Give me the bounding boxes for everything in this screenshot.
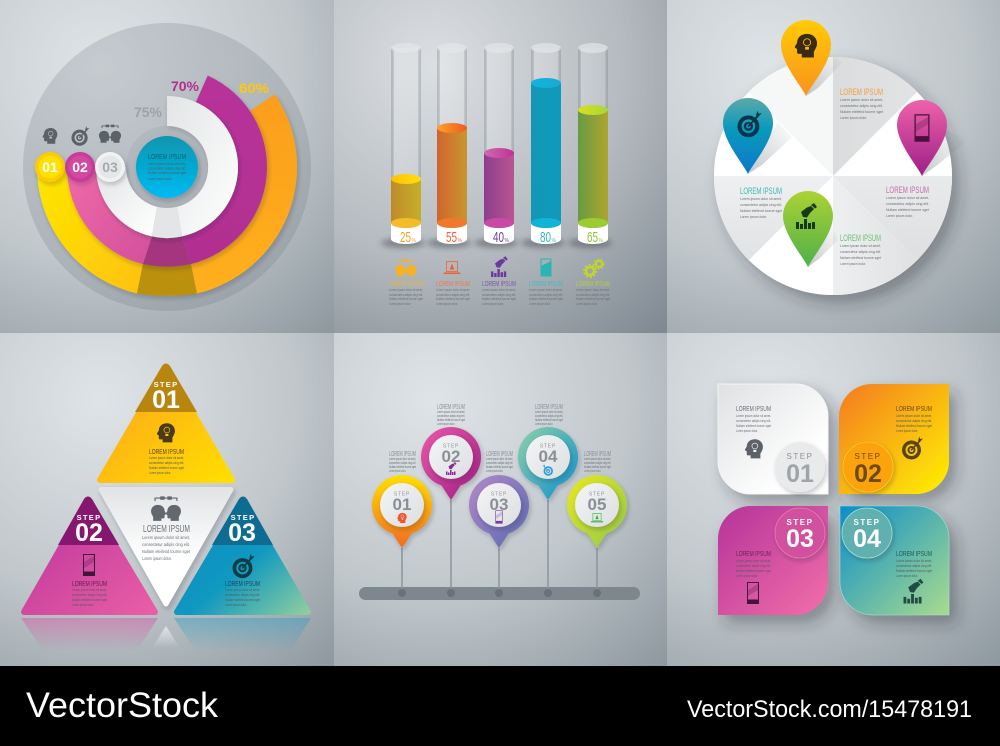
outer ring: 60% yellow orange	[37, 94, 297, 296]
center inverted triangle: Nullam eleifend tourne sget	[142, 549, 191, 554]
pin step 04	[518, 427, 578, 500]
square step 01: consectetur adipis cing elit.	[736, 419, 771, 423]
square step 04: consectetur adipis cing elit.	[896, 564, 932, 568]
triangle step 03: 03	[228, 519, 256, 547]
pin step 01	[372, 475, 432, 548]
square step 02: consectetur adipis cing elit.	[896, 419, 932, 423]
triangle step 01: Lorem ipsum dolor.	[149, 471, 171, 475]
pin step 01: 01	[393, 495, 411, 514]
block text east: Nullam eleifend tourne sget	[886, 208, 929, 212]
tube 65%: 65	[587, 229, 598, 246]
tube 65%	[568, 43, 612, 248]
tube 25%	[381, 43, 425, 248]
text above pin 02: Nullam eleifend tourne sget	[437, 418, 465, 422]
caption 4: LOREM IPSUM	[529, 279, 563, 288]
text above pin 01: Lorem ipsum dolor.	[389, 469, 406, 473]
text above pin 01: LOREM IPSUM	[389, 449, 416, 458]
square step 04: LOREM IPSUM	[896, 549, 932, 558]
square step 03: Lorem ipsum dolor sit amet,	[736, 559, 771, 563]
square step 04: STEP	[854, 518, 880, 527]
text above pin 01: Nullam eleifend tourne sget	[389, 465, 416, 469]
caption 4: Lorem ipsum dolor sit amet,	[529, 288, 563, 292]
tube 55%	[427, 43, 471, 248]
tube 40%: %	[504, 238, 510, 244]
block text south: Nullam eleifend tourne sget	[840, 256, 881, 260]
square step 02: Lorem ipsum dolor sit amet,	[896, 414, 932, 418]
caption 1: Lorem ipsum dolor.	[389, 302, 411, 306]
caption 3: Nullam eleifend tourne sget	[482, 297, 516, 301]
tube 40%	[474, 43, 518, 248]
text above pin 03	[486, 449, 513, 473]
number badge 01	[35, 152, 65, 182]
center inverted triangle	[101, 490, 231, 604]
panel: glass tube bar chart	[334, 0, 667, 333]
text above pin 05: Lorem ipsum dolor sit amet,	[584, 457, 611, 461]
tube 55%: %	[458, 238, 462, 244]
center circle with text	[126, 126, 208, 208]
text above pin 05: consectetur adipis cing elit.	[584, 461, 611, 465]
square step 04: Nullam eleifend tourne sget	[896, 569, 932, 573]
caption 3: Lorem ipsum dolor sit amet,	[482, 288, 516, 292]
block text north east: Lorem ipsum dolor sit amet,	[840, 98, 883, 102]
caption 2: Lorem ipsum dolor sit amet,	[436, 288, 470, 292]
percent labels: 60%	[239, 80, 270, 96]
caption 1: Nullam eleifend tourne sget	[389, 297, 423, 301]
triangle step 02: 02	[75, 519, 103, 547]
triangle step 03: Lorem ipsum dolor.	[225, 603, 247, 607]
caption 3: Lorem ipsum dolor.	[482, 302, 504, 306]
text above pin 04: LOREM IPSUM	[535, 402, 563, 411]
center inverted triangle: consectetur adipis cing elit.	[142, 542, 190, 547]
block text west: consectetur adipis cing elit.	[740, 203, 782, 207]
icon row	[42, 125, 121, 146]
block text east: LOREM IPSUM	[886, 185, 929, 195]
square step 02: LOREM IPSUM	[896, 404, 932, 413]
text above pin 04	[535, 402, 563, 426]
caption 2: LOREM IPSUM	[436, 279, 470, 288]
text above pin 02: Lorem ipsum dolor sit amet,	[437, 410, 465, 414]
square step 04: 04	[853, 525, 881, 553]
triangle step 02: Lorem ipsum dolor sit amet,	[72, 588, 107, 592]
tube 80%: 80	[540, 229, 551, 246]
square step 01: 01	[786, 460, 814, 488]
square step 01	[718, 384, 828, 494]
center inverted triangle: Lorem ipsum dolor sit amet,	[142, 535, 190, 540]
block text north east: Nullam eleifend tourne sget	[840, 110, 883, 114]
square step 03	[718, 506, 828, 615]
pin step 05	[567, 475, 627, 548]
pin step 04: 04	[539, 447, 558, 466]
triangle step 03: LOREM IPSUM	[225, 579, 260, 588]
caption 3: LOREM IPSUM	[482, 279, 516, 288]
square step 04	[840, 506, 949, 615]
triangle step 01	[100, 364, 232, 480]
block text east	[886, 185, 929, 218]
percent labels: 70%	[171, 78, 200, 94]
text above pin 01	[389, 449, 416, 473]
text above pin 04: Lorem ipsum dolor sit amet,	[535, 410, 563, 414]
number badge 01: 01	[42, 159, 58, 175]
tube 55%: 55	[446, 229, 457, 246]
text above pin 01: consectetur adipis cing elit.	[389, 461, 416, 465]
tube 40%: 40	[493, 229, 504, 246]
square step 04: Lorem ipsum dolor sit amet,	[896, 559, 932, 563]
triangle step 02: STEP	[77, 513, 101, 522]
caption 5: Lorem ipsum dolor sit amet,	[576, 288, 610, 292]
pin step 02: STEP	[443, 444, 459, 450]
square step 03: Lorem ipsum dolor.	[736, 574, 758, 578]
backdrop disc	[23, 23, 311, 311]
block text north east: consectetur adipis cing elit.	[840, 104, 883, 108]
tube 80%	[521, 43, 565, 248]
triangle step 03	[177, 496, 308, 612]
text above pin 02	[437, 402, 465, 426]
caption 1	[389, 259, 423, 306]
tube 25%: %	[412, 238, 416, 244]
square step 02: STEP	[855, 452, 881, 461]
square step 01: LOREM IPSUM	[736, 404, 771, 413]
block text west: Lorem ipsum dolor.	[740, 215, 767, 219]
block text west	[740, 186, 782, 219]
block text south: LOREM IPSUM	[840, 233, 881, 243]
triangle step 01: STEP	[154, 380, 178, 389]
marker stems and dots	[398, 500, 601, 597]
panel: timeline pins	[334, 333, 667, 666]
center circle with text: Lorem ipsum dolor.	[148, 177, 172, 181]
text above pin 05: LOREM IPSUM	[584, 449, 611, 458]
caption 4: consectetur adipis cing elit.	[529, 293, 563, 297]
square step 02: Nullam eleifend tourne sget	[896, 424, 932, 428]
caption 5: LOREM IPSUM	[576, 279, 610, 288]
caption 2	[436, 261, 470, 306]
inner ring: 75% white	[96, 96, 238, 238]
pin step 05: STEP	[589, 492, 605, 498]
triangle step 02: Lorem ipsum dolor.	[72, 603, 94, 607]
panel: folded paper circle with pins	[667, 0, 1000, 333]
text above pin 03: Lorem ipsum dolor sit amet,	[486, 457, 513, 461]
square step 03: LOREM IPSUM	[736, 549, 771, 558]
tube 25%: 25	[400, 229, 411, 246]
block text north east	[840, 87, 883, 120]
block text south: Lorem ipsum dolor.	[840, 262, 866, 266]
block text south	[840, 233, 881, 266]
square step 03: STEP	[787, 518, 813, 527]
center circle with text: Nullam eleifend tourne sget	[148, 171, 186, 175]
square step 01: Lorem ipsum dolor.	[736, 429, 758, 433]
square step 01: STEP	[787, 452, 813, 461]
image url: VectorStock.com/15478191	[687, 696, 972, 723]
block text east: consectetur adipis cing elit.	[886, 202, 929, 206]
footer band	[0, 666, 1000, 746]
triangle step 02: LOREM IPSUM	[72, 579, 107, 588]
square step 03: 03	[786, 525, 814, 553]
square step 01: Lorem ipsum dolor sit amet,	[736, 414, 771, 418]
percent labels	[134, 78, 270, 120]
middle ring: 70% magenta	[67, 76, 267, 266]
center inverted triangle: LOREM IPSUM	[143, 524, 190, 535]
text above pin 03: Nullam eleifend tourne sget	[486, 465, 513, 469]
block text north east: Lorem ipsum dolor.	[840, 116, 867, 120]
pin step 02	[421, 427, 481, 500]
text above pin 04: consectetur adipis cing elit.	[535, 414, 563, 418]
text above pin 01: Lorem ipsum dolor sit amet,	[389, 457, 416, 461]
text above pin 05: Lorem ipsum dolor.	[584, 469, 601, 473]
caption 1: Lorem ipsum dolor sit amet,	[389, 288, 423, 292]
brand wordmark: VectorStock	[26, 686, 219, 725]
percent labels: 75%	[134, 104, 163, 120]
panel: triangle steps	[0, 333, 334, 666]
triangle step 03: STEP	[231, 513, 255, 522]
block text west: LOREM IPSUM	[740, 186, 782, 196]
triangle step 03: Lorem ipsum dolor sit amet,	[225, 588, 260, 592]
triangle step 01: consectetur adipis cing elit.	[149, 461, 184, 465]
caption 4: Nullam eleifend tourne sget	[529, 297, 563, 301]
triangle step 02: consectetur adipis cing elit.	[72, 593, 107, 597]
caption 4: Lorem ipsum dolor.	[529, 302, 551, 306]
square step 04: Lorem ipsum dolor.	[896, 574, 918, 578]
triangle step 03: Nullam eleifend tourne sget	[225, 598, 260, 602]
triangle step 01: 01	[152, 386, 180, 414]
square step 02: 02	[854, 460, 882, 488]
caption 5: Lorem ipsum dolor.	[576, 302, 598, 306]
tube 80%: %	[552, 238, 556, 244]
number badge 03	[95, 152, 125, 182]
text above pin 02: consectetur adipis cing elit.	[437, 414, 465, 418]
panel: petal squares	[667, 333, 1000, 666]
square step 02	[839, 384, 949, 494]
caption 2: Lorem ipsum dolor.	[436, 302, 458, 306]
reflections	[21, 618, 311, 652]
pin yellow with head icon	[781, 20, 843, 96]
block text west: Nullam eleifend tourne sget	[740, 209, 782, 213]
pin magenta with phone icon	[897, 100, 966, 176]
pin step 01: STEP	[394, 492, 410, 498]
triangle step 01: LOREM IPSUM	[149, 447, 184, 456]
pin blue with target icon	[723, 98, 792, 174]
caption 4	[529, 259, 563, 306]
pin step 03: 03	[490, 495, 508, 514]
number badge 02: 02	[72, 159, 88, 175]
block text west: Lorem ipsum dolor sit amet,	[740, 197, 782, 201]
pin step 04: STEP	[540, 444, 556, 450]
caption 5: consectetur adipis cing elit.	[576, 293, 610, 297]
panel: circular progress rings	[0, 0, 334, 333]
pin step 03	[469, 475, 529, 548]
triangle step 02	[24, 496, 155, 612]
triangle step 01: Nullam eleifend tourne sget	[149, 466, 184, 470]
square step 03: Nullam eleifend tourne sget	[736, 569, 771, 573]
center circle with text: consectetur adipis cing elit.	[148, 166, 186, 170]
folded paper disc	[700, 50, 960, 309]
text above pin 05: Nullam eleifend tourne sget	[584, 465, 611, 469]
center circle with text: Lorem ipsum dolor sit amet,	[148, 162, 186, 166]
text above pin 05	[584, 449, 611, 473]
caption 2: Nullam eleifend tourne sget	[436, 297, 470, 301]
caption 1: consectetur adipis cing elit.	[389, 293, 423, 297]
text above pin 04: Lorem ipsum dolor.	[535, 422, 553, 426]
caption 5	[576, 259, 610, 306]
number badge 02	[65, 152, 95, 182]
square step 01: Nullam eleifend tourne sget	[736, 424, 771, 428]
center inverted triangle: Lorem ipsum dolor.	[142, 556, 172, 561]
text above pin 03: consectetur adipis cing elit.	[486, 461, 513, 465]
caption 1: LOREM IPSUM	[389, 279, 423, 288]
tube 65%: %	[598, 238, 604, 244]
caption 3	[482, 256, 516, 306]
text above pin 04: Nullam eleifend tourne sget	[535, 418, 563, 422]
pin step 02: 02	[442, 447, 460, 466]
caption 5: Nullam eleifend tourne sget	[576, 297, 610, 301]
timeline bar	[359, 587, 640, 600]
caption 3: consectetur adipis cing elit.	[482, 293, 516, 297]
block text east: Lorem ipsum dolor.	[886, 214, 913, 218]
pin step 05: 05	[588, 495, 606, 514]
square step 03: consectetur adipis cing elit.	[736, 564, 771, 568]
text above pin 03: LOREM IPSUM	[486, 449, 513, 458]
block text south: Lorem ipsum dolor sit amet,	[840, 244, 881, 248]
block text north east: LOREM IPSUM	[840, 87, 883, 97]
number badge 03: 03	[102, 159, 118, 175]
text above pin 02: LOREM IPSUM	[437, 402, 465, 411]
pin green with chart icon	[783, 191, 838, 267]
square step 02: Lorem ipsum dolor.	[896, 429, 918, 433]
triangle step 01: Lorem ipsum dolor sit amet,	[149, 456, 184, 460]
pin step 03: STEP	[491, 492, 507, 498]
triangle step 02: Nullam eleifend tourne sget	[72, 598, 107, 602]
block text south: consectetur adipis cing elit.	[840, 250, 881, 254]
block text east: Lorem ipsum dolor sit amet,	[886, 196, 929, 200]
center circle with text: LOREM IPSUM	[148, 152, 186, 161]
text above pin 02: Lorem ipsum dolor.	[437, 422, 455, 426]
caption 2: consectetur adipis cing elit.	[436, 293, 470, 297]
text above pin 03: Lorem ipsum dolor.	[486, 469, 503, 473]
triangle step 03: consectetur adipis cing elit.	[225, 593, 260, 597]
